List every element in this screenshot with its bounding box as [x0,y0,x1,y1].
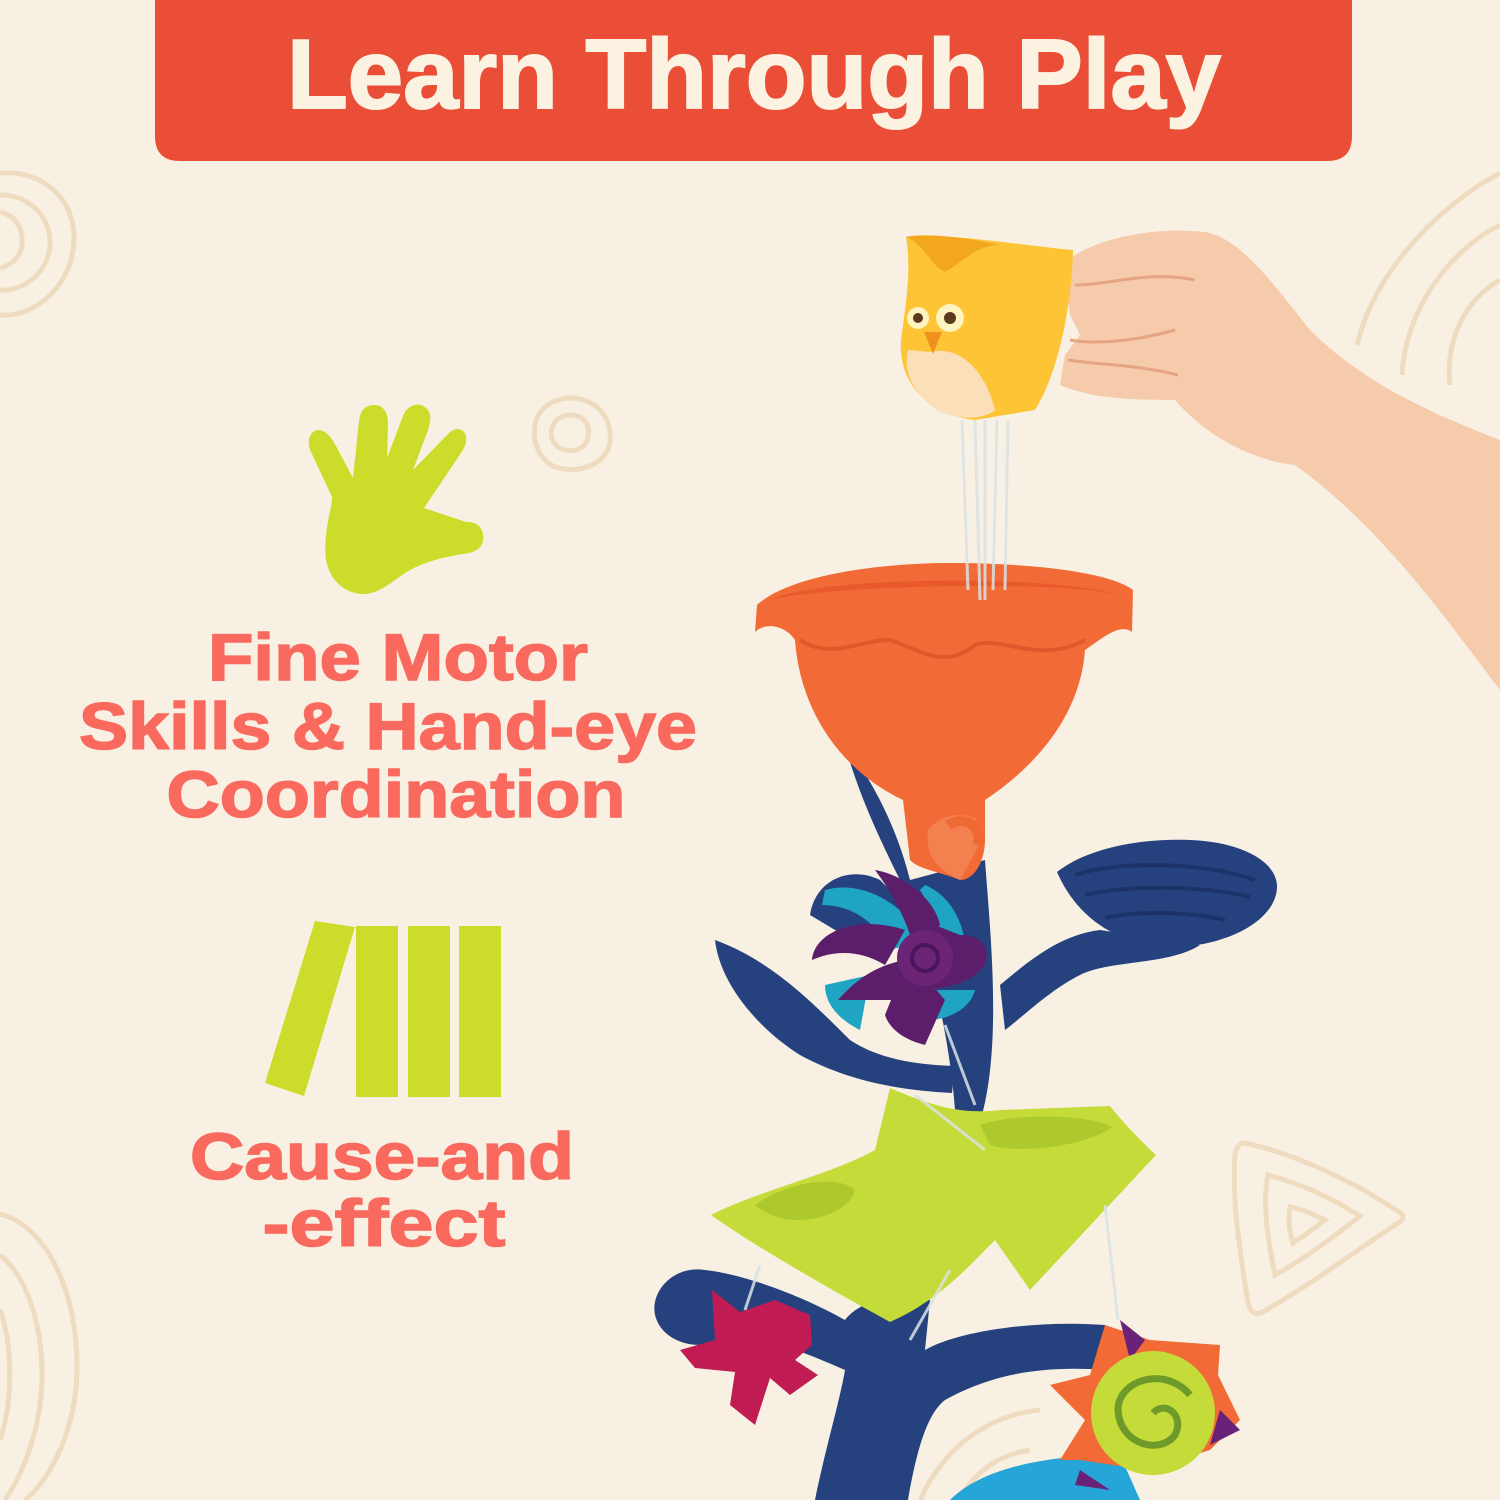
orange funnel [755,563,1133,880]
red pinwheel [680,1290,818,1425]
icon: hand [309,405,483,594]
green slide [711,1088,1156,1322]
icon: books [265,921,501,1097]
text: cause and effect [190,1119,574,1260]
text: fine motor skills: Skills & Hand-eye [79,689,697,763]
text: cause and effect: -effect [262,1186,506,1260]
hand holding owl cup [1060,231,1500,690]
water [745,420,1118,1340]
title banner [155,0,1352,161]
toy: water tower [654,420,1277,1500]
text: fine motor skills [79,620,697,831]
funnel tap handle [948,821,979,845]
blue pool [950,1455,1140,1500]
text: fine motor skills: Fine Motor [208,620,588,694]
nest texture [1075,865,1255,920]
orange and green pinwheel [1050,1320,1240,1490]
purple pinwheel [812,870,987,1045]
owl cup [901,235,1073,420]
text: cause and effect: Cause-and [190,1119,574,1193]
title: Learn Through Play [287,19,1221,129]
navy trunk [654,745,1277,1500]
text: fine motor skills: Coordination [166,757,626,831]
